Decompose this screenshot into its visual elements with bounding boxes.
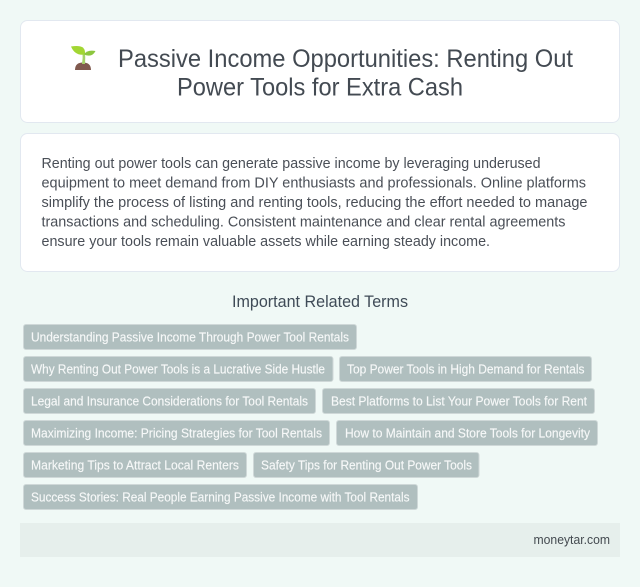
text block: description: simplify the process of listing and renting tools, reducing the effort needed to manage (42, 195, 588, 211)
text block: description (42, 156, 588, 250)
title (118, 45, 573, 102)
tag: Safety Tips for Renting Out Power Tools (261, 458, 472, 472)
tag (24, 420, 330, 446)
tag list (24, 324, 598, 510)
icon: sprout emoji (71, 46, 96, 70)
title: Passive Income Opportunities: Renting Out (118, 45, 573, 73)
tag: Marketing Tips to Attract Local Renters (31, 458, 239, 472)
panel: description card (20, 134, 620, 272)
title: Power Tools for Extra Cash (177, 74, 463, 102)
panel: header card (20, 20, 620, 122)
tag: Maximizing Income: Pricing Strategies for Tool Rentals (31, 426, 322, 440)
tag (336, 420, 598, 446)
tag (24, 484, 418, 510)
text block: description: equipment to meet demand from DIY enthusiasts and professionals. Online platforms (42, 176, 586, 192)
footer: moneytar.com (534, 533, 610, 547)
tag (254, 452, 479, 478)
tag: Legal and Insurance Considerations for Tool Rentals (31, 394, 308, 408)
tag (322, 388, 594, 414)
tag (340, 356, 592, 382)
tag: Why Renting Out Power Tools is a Lucrative Side Hustle (31, 362, 325, 376)
heading: important related terms: Important Related Terms (232, 293, 408, 311)
text block: description: Renting out power tools can generate passive income by leveraging underused (42, 156, 540, 172)
text block: description: transactions and scheduling. Consistent maintenance and clear rental agreements (42, 214, 566, 230)
tag: Success Stories: Real People Earning Passive Income with Tool Rentals (31, 490, 410, 504)
tag (24, 356, 333, 382)
tag: Best Platforms to List Your Power Tools for Rent (331, 394, 587, 408)
tag: How to Maintain and Store Tools for Longevity (345, 426, 591, 440)
tag (24, 324, 356, 350)
footer (20, 523, 620, 557)
text block: description: ensure your tools remain valuable assets while earning steady income. (42, 234, 490, 250)
tag: Understanding Passive Income Through Power Tool Rentals (31, 330, 349, 344)
tag (24, 452, 246, 478)
tag (24, 388, 316, 414)
tag: Top Power Tools in High Demand for Rentals (347, 362, 584, 376)
